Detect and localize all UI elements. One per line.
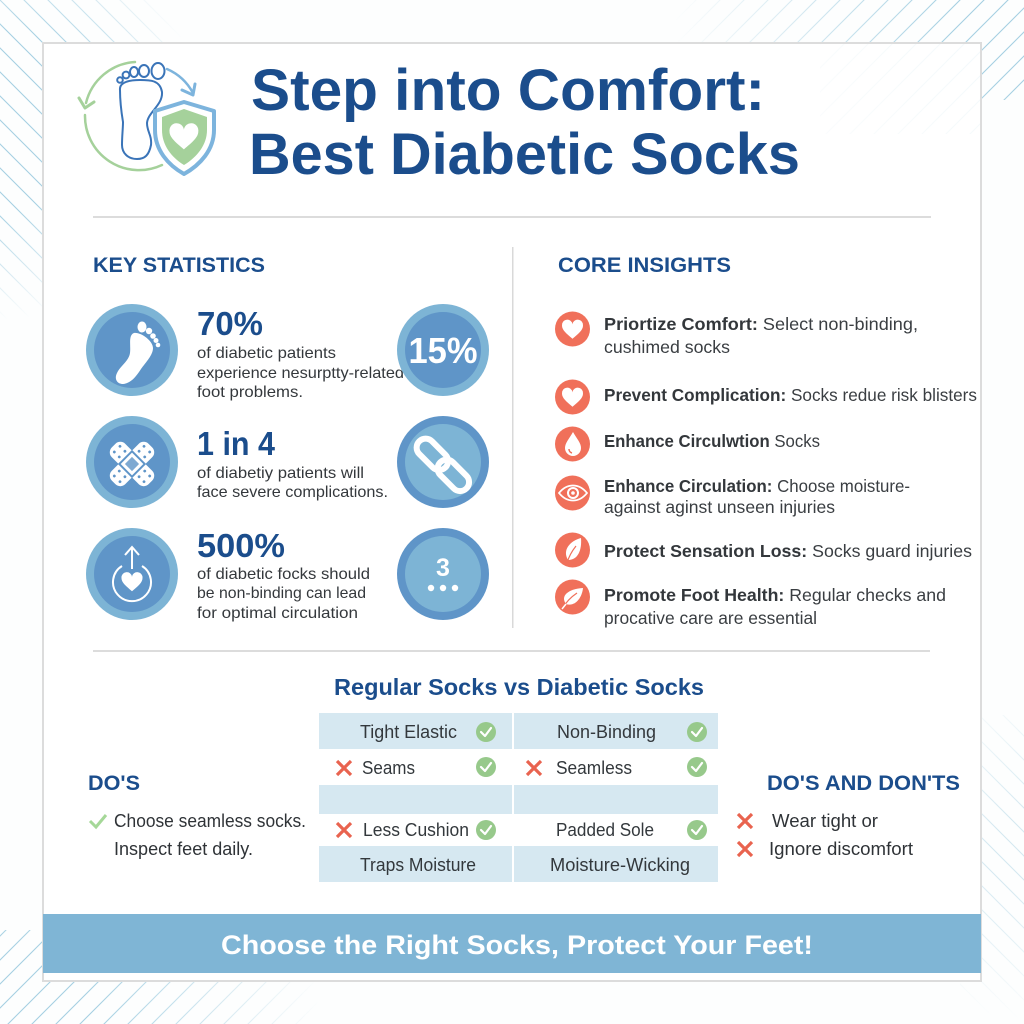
comparison table: Seams xyxy=(362,758,415,778)
stat: 70%: experience nesurptty-related xyxy=(197,365,404,382)
insight: prioritize comfort: Priortize Comfort: Select non-binding, xyxy=(604,314,918,334)
panel: do's xyxy=(88,772,306,859)
stat: 70%: 70% xyxy=(197,305,263,342)
stat: 500%: of diabetic focks should xyxy=(197,566,370,583)
banner: Choose the Right Socks, Protect Your Feet! xyxy=(221,930,813,960)
badge: 15% xyxy=(397,304,489,396)
icon: heart circulation badge xyxy=(86,528,178,620)
icon: chain badge xyxy=(397,416,489,508)
stat: 500%: be non-binding can lead xyxy=(197,585,366,602)
icon: foot badge xyxy=(86,304,178,396)
badge: 3 with dots: 3 xyxy=(436,554,450,582)
badge: 3 with dots xyxy=(397,528,489,620)
title: Step into Comfort: xyxy=(251,58,765,123)
title xyxy=(249,58,800,187)
insight: promote foot health: procative care are essential xyxy=(604,608,817,628)
heading: comparison: Regular Socks vs Diabetic Socks xyxy=(334,674,704,700)
stat: 500% xyxy=(197,527,370,622)
insight: prioritize comfort: cushimed socks xyxy=(604,337,730,357)
comparison table xyxy=(319,713,718,882)
panel: core insights xyxy=(555,254,977,628)
stat: 1 in 4: face severe complications. xyxy=(197,484,388,501)
stat: 70%: foot problems. xyxy=(197,384,303,401)
heading: core insights: CORE INSIGHTS xyxy=(558,254,731,277)
comparison table: Non-Binding xyxy=(557,722,656,742)
icon: bandage badge xyxy=(86,416,178,508)
comparison table: Traps Moisture xyxy=(360,855,476,875)
badge: 15%: 15% xyxy=(408,330,478,371)
panel: do's: Inspect feet daily. xyxy=(114,839,253,859)
insight: prevent complication: Prevent Complication: Socks redue risk blisters xyxy=(604,385,977,405)
insight: enhance circulation socks xyxy=(555,426,820,462)
panel: key statistics xyxy=(86,254,489,622)
insight: enhance circulation moisture: Enhance Circulation: Choose moisture- xyxy=(604,476,910,496)
insight: enhance circulation moisture xyxy=(555,476,910,517)
comparison table: Seamless xyxy=(556,758,632,778)
panel: do's and don'ts: DO'S AND DON'TS xyxy=(767,772,960,795)
panel: do's and don'ts xyxy=(738,772,960,859)
insight: promote foot health xyxy=(555,580,946,628)
insight: enhance circulation socks: Enhance Circulwtion Socks xyxy=(604,431,820,451)
comparison table: Tight Elastic xyxy=(360,722,457,742)
icon: foot and shield logo xyxy=(79,62,214,174)
comparison table: Padded Sole xyxy=(556,820,654,840)
panel: do's and don'ts: Wear tight or xyxy=(772,811,878,831)
insight: promote foot health: Promote Foot Health: Regular checks and xyxy=(604,585,946,605)
stat: 1 in 4: of diabetiy patients will xyxy=(197,465,364,482)
panel: do's and don'ts: Ignore discomfort xyxy=(769,839,913,859)
stat: 1 in 4: 1 in 4 xyxy=(197,425,276,462)
comparison table: Less Cushion xyxy=(363,820,469,840)
panel: do's: DO'S xyxy=(88,772,140,795)
insight: prevent complication xyxy=(555,380,977,414)
insight: protect sensation loss xyxy=(555,532,972,568)
insight: enhance circulation moisture: against aginst unseen injuries xyxy=(604,497,835,517)
stat: 1 in 4 xyxy=(197,425,388,501)
banner xyxy=(43,914,981,973)
heading: key statistics: KEY STATISTICS xyxy=(93,254,265,277)
insight: prioritize comfort xyxy=(555,312,918,357)
insight: protect sensation loss: Protect Sensation Loss: Socks guard injuries xyxy=(604,541,972,561)
title: Best Diabetic Socks xyxy=(249,122,800,187)
stat: 70%: of diabetic patients xyxy=(197,345,336,362)
panel: do's: Choose seamless socks. xyxy=(114,811,306,831)
stat: 500%: for optimal circulation xyxy=(197,605,358,622)
comparison table: Moisture-Wicking xyxy=(550,855,690,875)
stat: 500%: 500% xyxy=(197,527,285,564)
stat: 70% xyxy=(197,305,404,401)
